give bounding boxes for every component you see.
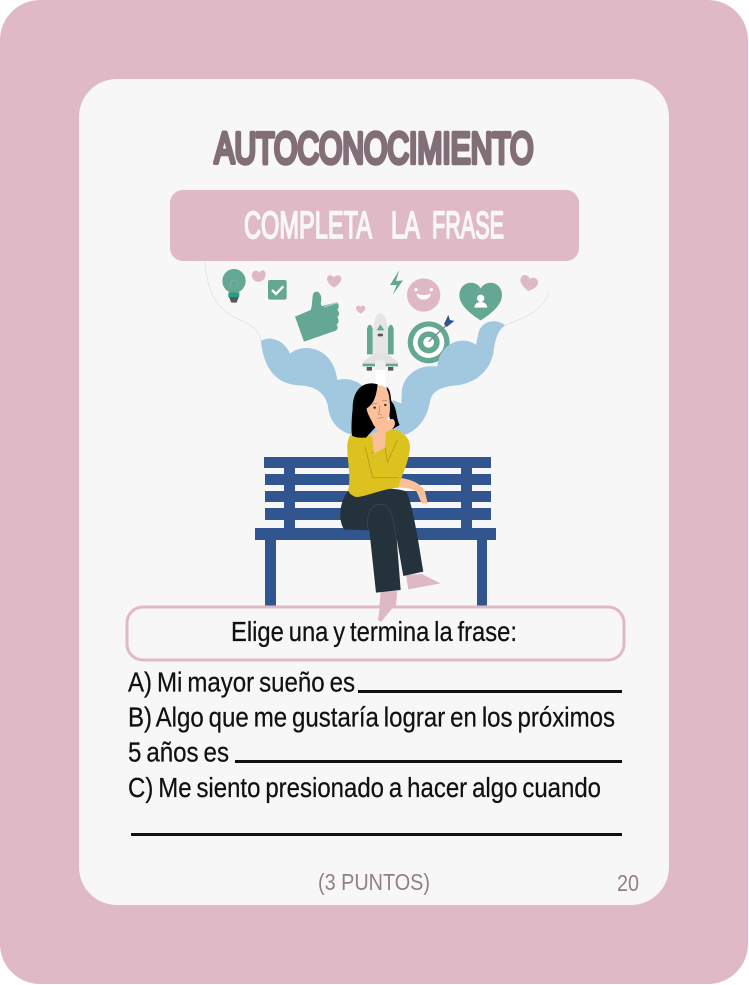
subtitle banner bbox=[170, 190, 579, 261]
instruction text: Elige una y termina la frase: bbox=[231, 616, 517, 647]
option A bbox=[128, 666, 622, 698]
icon: tiny heart bbox=[356, 306, 365, 314]
icon: target with arrow bbox=[408, 315, 454, 363]
icon: light bulb bbox=[222, 269, 246, 303]
option B: B) Algo que me gustaría lograr en los próximos bbox=[128, 702, 615, 732]
icon: small heart bbox=[252, 270, 266, 282]
icon: check box bbox=[268, 280, 287, 300]
icon: rocket bbox=[363, 313, 398, 387]
neck bbox=[372, 430, 386, 453]
front foot over box bbox=[378, 597, 396, 622]
face bbox=[367, 385, 390, 428]
illustration: bench bbox=[255, 457, 496, 607]
page number: 20 bbox=[617, 870, 639, 896]
option C: C) Me siento presionado a hacer algo cuando bbox=[128, 772, 601, 803]
title: AUTOCONOCIMIENTO bbox=[214, 124, 534, 173]
illustration: thought cloud with icons bbox=[205, 262, 549, 435]
thought outline bbox=[205, 262, 549, 342]
hand on chin bbox=[375, 419, 395, 432]
trousers bbox=[340, 488, 423, 593]
subtitle text: FRASE bbox=[432, 205, 504, 247]
feet bbox=[406, 574, 441, 589]
icon: thumbs up bbox=[295, 292, 339, 342]
sweater fold lines bbox=[365, 440, 398, 478]
icon: heart bbox=[327, 275, 341, 288]
hair back bbox=[352, 383, 378, 438]
sweater bbox=[347, 429, 410, 497]
option B: 5 años es bbox=[128, 736, 229, 768]
icon: heart with person bbox=[459, 283, 502, 320]
points label: (3 PUNTOS) bbox=[318, 869, 430, 895]
knee line bbox=[367, 504, 396, 538]
option B bbox=[128, 702, 622, 768]
instruction box bbox=[127, 607, 624, 660]
icon: smiley bbox=[407, 278, 440, 312]
hair right side bbox=[387, 387, 400, 429]
blue cloud left bbox=[261, 339, 380, 435]
panel: white card bbox=[79, 79, 669, 905]
hand and arm bbox=[398, 478, 428, 503]
option C bbox=[128, 772, 622, 836]
illustration: thinking woman bbox=[340, 383, 441, 622]
icon: big heart bbox=[520, 275, 538, 291]
blue cloud right bbox=[388, 321, 505, 435]
option A: A) Mi mayor sueño es bbox=[128, 666, 355, 698]
subtitle text: COMPLETA bbox=[244, 205, 372, 247]
icon: lightning bolt bbox=[390, 270, 403, 295]
subtitle text: LA bbox=[391, 205, 420, 247]
facial features bbox=[371, 400, 387, 418]
